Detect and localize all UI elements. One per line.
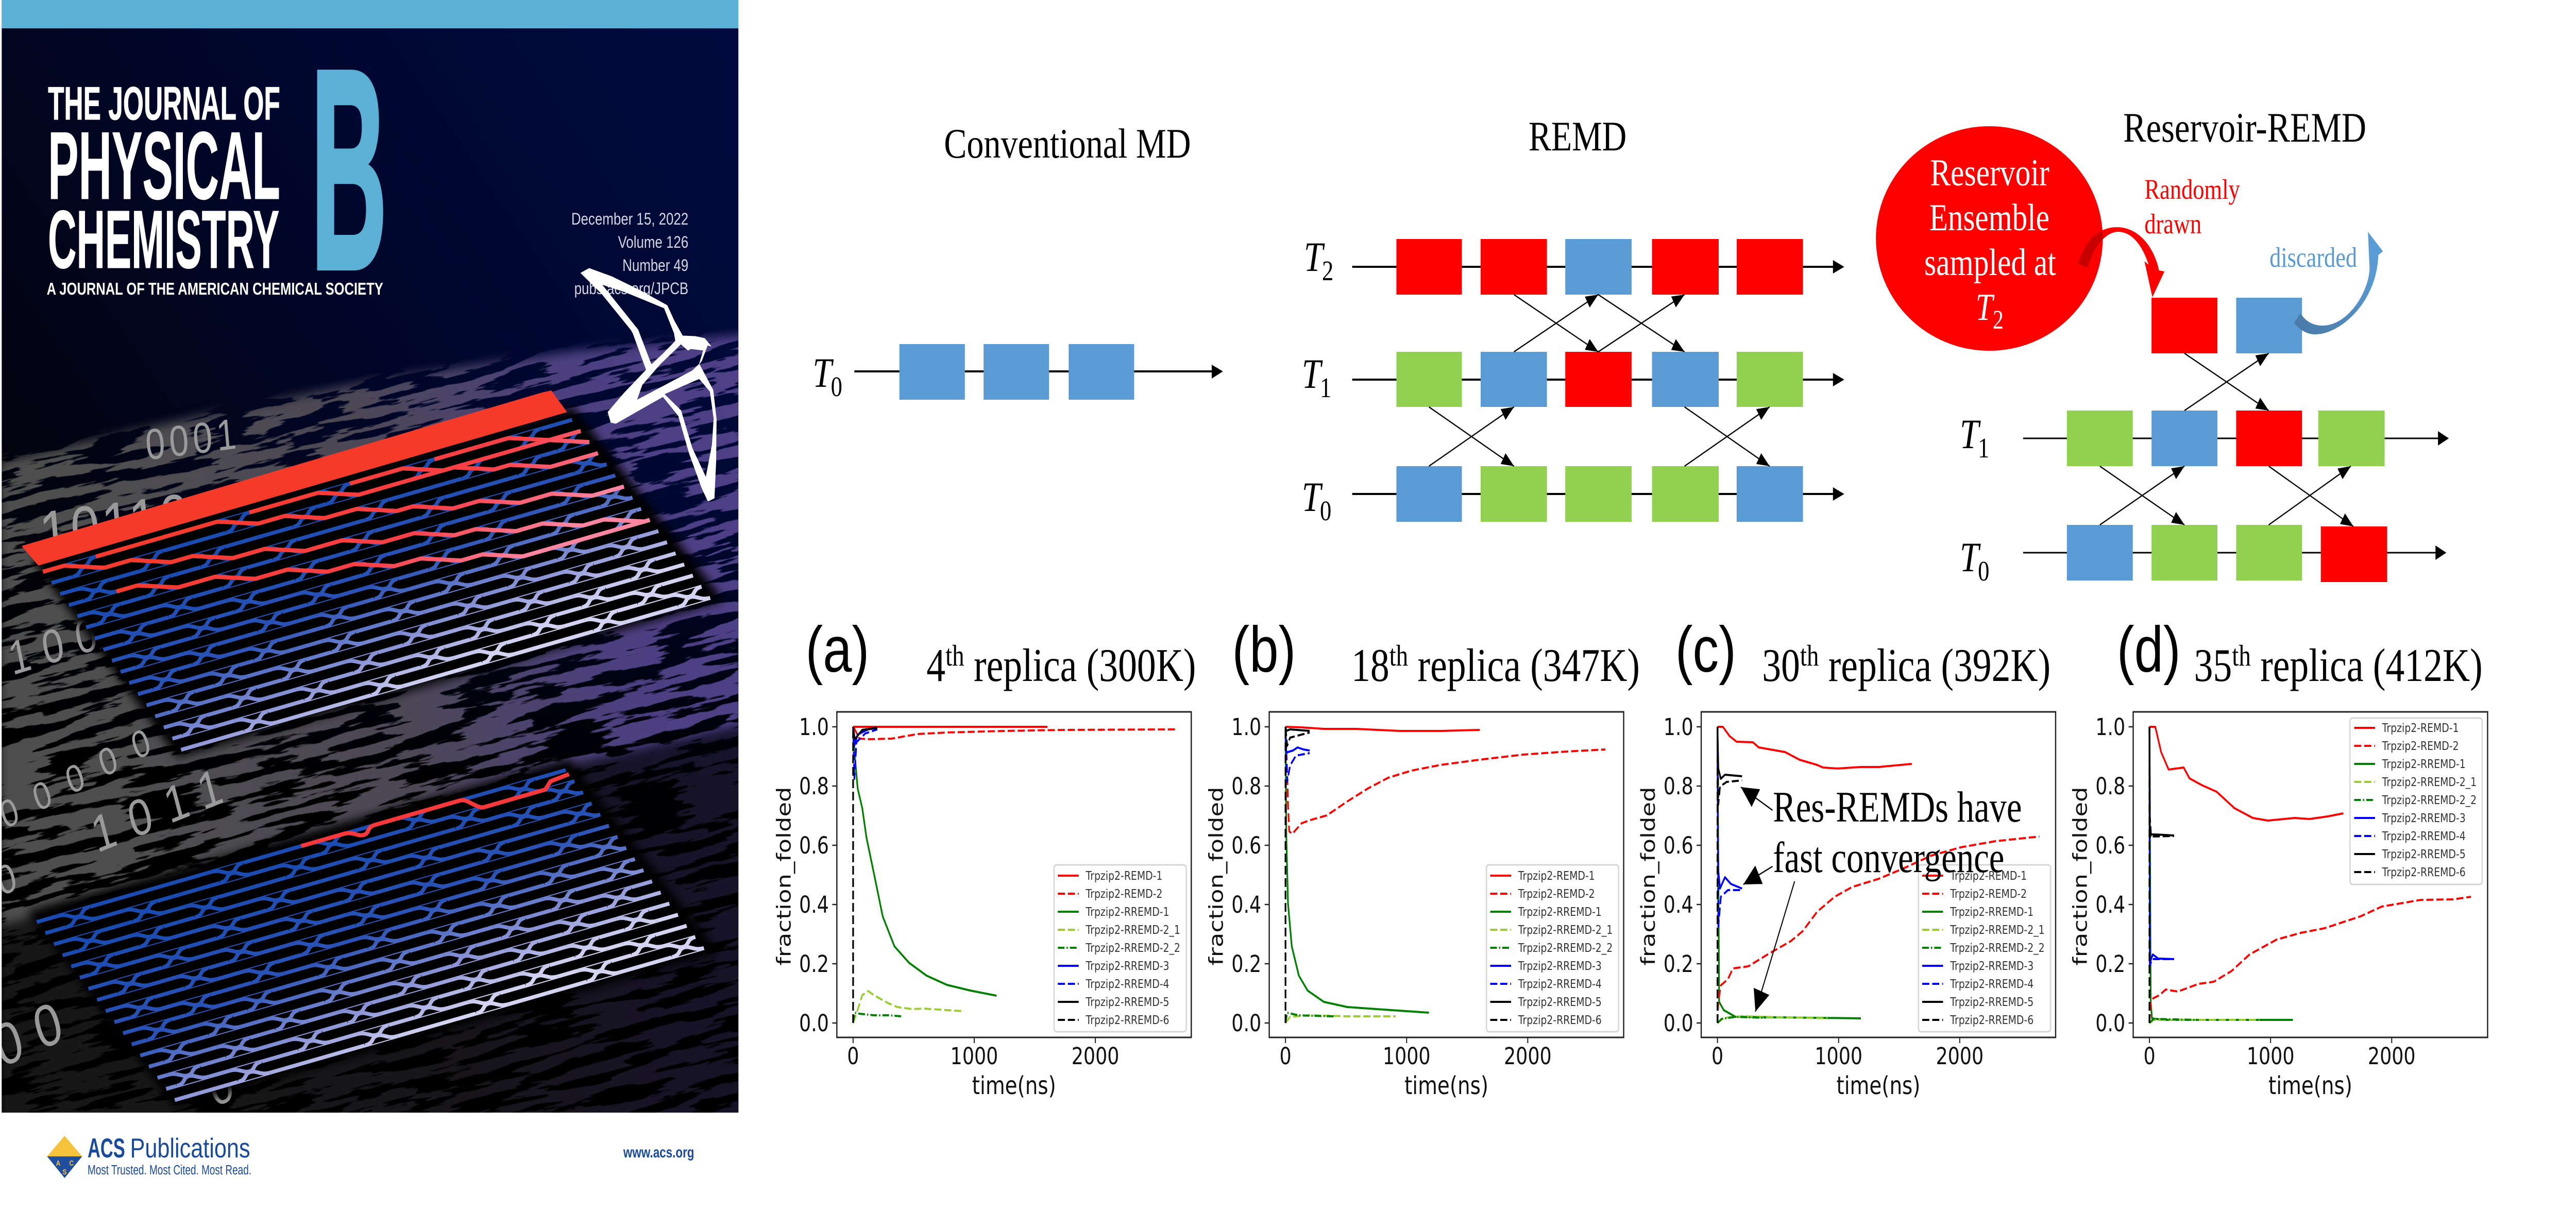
line chart: Trpzip2-RREMD-3 bbox=[1518, 959, 1602, 973]
reservoir text: Ensemble bbox=[1929, 196, 2049, 238]
line chart: 0.6 bbox=[2095, 832, 2125, 859]
reservoir text: sampled at bbox=[1924, 241, 2056, 283]
line chart: Trpzip2-RREMD-3 bbox=[2382, 811, 2466, 825]
line chart: Trpzip2-RREMD-4 bbox=[1086, 977, 1170, 991]
journal title: THE JOURNAL OF bbox=[48, 77, 280, 130]
line chart: Trpzip2-RREMD-2_1 bbox=[1518, 923, 1613, 936]
chart title: th bbox=[2232, 639, 2251, 672]
line chart bbox=[773, 712, 1191, 1100]
line chart: Trpzip2-RREMD-2_1 bbox=[2382, 775, 2477, 789]
callout: Res-REMDs have fast convergence bbox=[1741, 782, 2022, 1012]
panel: chart (d) bbox=[2069, 614, 2487, 1100]
timeline arrowheads bbox=[1833, 260, 1844, 501]
line chart: fraction_folded bbox=[1637, 787, 1659, 966]
line chart: Trpzip2-RREMD-1 bbox=[1950, 905, 2033, 918]
line chart: time(ns) bbox=[1404, 1071, 1488, 1100]
line chart: time(ns) bbox=[972, 1071, 1056, 1100]
replica boxes bbox=[900, 344, 1134, 400]
cover artwork background: 0001 bbox=[144, 410, 238, 470]
line chart: Trpzip2-RREMD-2_1 bbox=[1086, 923, 1180, 936]
journal title: CHEMISTRY bbox=[48, 193, 279, 285]
line chart: Trpzip2-RREMD-4 bbox=[1950, 977, 2033, 991]
line chart: Trpzip2-REMD-1 bbox=[1518, 868, 1595, 882]
ACS logo bbox=[47, 1136, 82, 1178]
line chart: 0.8 bbox=[2095, 773, 2125, 800]
line chart: 0.0 bbox=[1664, 1010, 1693, 1037]
line chart: Trpzip2-REMD-2 bbox=[1086, 886, 1162, 900]
line chart: fraction_folded bbox=[773, 787, 795, 966]
T0 label: T bbox=[812, 350, 834, 397]
line chart: 2000 bbox=[2368, 1043, 2416, 1070]
panel label (d): (d) bbox=[2117, 614, 2181, 686]
temperature labels: 1 bbox=[1320, 372, 1331, 403]
line chart: 0.8 bbox=[799, 773, 829, 800]
red top bar of waveguide board bbox=[22, 390, 567, 566]
temperature labels: T bbox=[1302, 474, 1323, 521]
cover artwork background: 1011 bbox=[86, 752, 242, 864]
waveguide mesh board 2 bbox=[36, 770, 704, 1101]
line chart: Trpzip2-REMD-2 bbox=[2382, 739, 2459, 753]
panel: Reservoir-REMD schematic bbox=[1876, 105, 2449, 587]
temperature labels: 1 bbox=[1978, 432, 1989, 464]
heading: REMD: REMD bbox=[1529, 114, 1626, 160]
issue details: pubs.acs.org/JPCB bbox=[574, 280, 688, 298]
line chart: Trpzip2-RREMD-5 bbox=[1086, 995, 1170, 1009]
label: randomly drawn bbox=[2144, 174, 2240, 240]
panel: conventional MD schematic bbox=[812, 121, 1223, 402]
heading: Reservoir-REMD: Reservoir-REMD bbox=[2123, 105, 2366, 151]
line chart: Trpzip2-RREMD-2_2 bbox=[2382, 793, 2477, 807]
cover artwork background: 10110 bbox=[37, 480, 192, 571]
temperature labels: T bbox=[1304, 234, 1325, 281]
line chart bbox=[2069, 712, 2487, 1100]
chart title: 30 bbox=[1762, 639, 1800, 691]
line chart: Trpzip2-RREMD-1 bbox=[1518, 905, 1602, 918]
panel: journal cover bbox=[0, 0, 738, 1178]
line chart: 0.6 bbox=[1664, 832, 1693, 859]
heading: Conventional MD: Conventional MD bbox=[944, 121, 1191, 167]
chart title: th bbox=[945, 639, 964, 672]
T0 label: 0 bbox=[831, 371, 842, 402]
line chart: Trpzip2-RREMD-6 bbox=[1518, 1013, 1602, 1027]
journal subtitle: A JOURNAL OF THE AMERICAN CHEMICAL SOCIETY bbox=[47, 280, 383, 299]
line chart: 1.0 bbox=[799, 713, 829, 741]
line chart: 0.2 bbox=[1664, 950, 1693, 978]
line chart: 1.0 bbox=[1664, 713, 1693, 741]
line chart: Trpzip2-RREMD-5 bbox=[1950, 995, 2033, 1009]
replica boxes bbox=[2067, 298, 2387, 582]
timelines bbox=[2023, 438, 2439, 553]
temperature labels: 0 bbox=[1320, 495, 1331, 526]
line chart: Trpzip2-RREMD-3 bbox=[1086, 959, 1170, 973]
line chart: Trpzip2-RREMD-2_1 bbox=[1950, 923, 2045, 936]
temperature labels: 2 bbox=[1322, 255, 1333, 286]
line chart: 0.8 bbox=[1664, 773, 1693, 800]
line chart: 1000 bbox=[1383, 1043, 1431, 1070]
arrow: randomly drawn bbox=[2078, 227, 2164, 297]
line chart: 0 bbox=[847, 1043, 859, 1070]
journal title bbox=[48, 77, 280, 285]
line chart: 1000 bbox=[951, 1043, 998, 1070]
issue details: Number 49 bbox=[622, 257, 688, 275]
line chart: 0 bbox=[2143, 1043, 2156, 1070]
cover top band bbox=[2, 0, 738, 28]
line chart: 0.2 bbox=[1231, 950, 1261, 978]
reservoir ensemble ellipse bbox=[1876, 126, 2103, 351]
waveguide mesh board 1 bbox=[42, 419, 711, 751]
label: discarded: discarded bbox=[2269, 242, 2357, 273]
panel: chart (b) bbox=[1205, 614, 1640, 1100]
line chart: time(ns) bbox=[2268, 1071, 2352, 1100]
line chart: Trpzip2-REMD-1 bbox=[2382, 721, 2459, 735]
line chart: Trpzip2-RREMD-6 bbox=[1950, 1013, 2033, 1027]
line chart: 0 bbox=[1711, 1043, 1723, 1070]
panel: REMD schematic bbox=[1302, 114, 1844, 526]
journal title: PHYSICAL bbox=[48, 112, 280, 220]
line chart: Trpzip2-RREMD-2_2 bbox=[1950, 941, 2045, 954]
temperature labels: T bbox=[1302, 351, 1323, 398]
line chart: 2000 bbox=[1936, 1043, 1984, 1070]
line chart: 0.4 bbox=[799, 891, 829, 918]
line chart: Trpzip2-RREMD-5 bbox=[2382, 847, 2466, 861]
line chart: Trpzip2-RREMD-6 bbox=[1086, 1013, 1170, 1027]
line chart: Trpzip2-RREMD-2_2 bbox=[1518, 941, 1613, 954]
line chart bbox=[1205, 712, 1624, 1100]
line chart: 0 bbox=[1280, 1043, 1292, 1070]
issue details: Volume 126 bbox=[618, 234, 688, 252]
line chart: 1000 bbox=[1815, 1043, 1862, 1070]
chart title: 35 bbox=[2194, 639, 2232, 691]
icon: falcon bbox=[581, 268, 716, 501]
chart title: replica (412K) bbox=[2251, 639, 2483, 691]
line chart: 0.2 bbox=[799, 950, 829, 978]
reservoir text: T bbox=[1976, 286, 1995, 328]
line chart: fraction_folded bbox=[1205, 787, 1228, 966]
exchange arrows bbox=[1429, 295, 1770, 466]
line chart: Trpzip2-RREMD-4 bbox=[1518, 977, 1602, 991]
chart title: replica (347K) bbox=[1408, 639, 1640, 691]
line chart: Trpzip2-REMD-1 bbox=[1950, 868, 2027, 882]
line chart bbox=[1637, 712, 2056, 1100]
panel label (c): (c) bbox=[1675, 614, 1736, 686]
line chart: 2000 bbox=[1504, 1043, 1552, 1070]
line chart: 0.4 bbox=[1664, 891, 1693, 918]
timeline arrowheads bbox=[2435, 431, 2449, 560]
temperature labels bbox=[1960, 412, 1989, 587]
ACS logo: C bbox=[69, 1159, 74, 1167]
line chart: 1000 bbox=[2247, 1043, 2295, 1070]
line chart: Trpzip2-RREMD-5 bbox=[1518, 995, 1602, 1009]
issue details bbox=[571, 211, 688, 298]
temperature labels: T bbox=[1960, 412, 1981, 458]
label: randomly drawn: Randomly bbox=[2144, 174, 2240, 205]
ACS logo: S bbox=[62, 1168, 66, 1176]
panel label (a): (a) bbox=[806, 614, 869, 686]
line chart: Trpzip2-RREMD-1 bbox=[2382, 757, 2466, 771]
line chart: Trpzip2-RREMD-3 bbox=[1950, 959, 2033, 973]
cover artwork background: 0 bbox=[202, 1054, 240, 1118]
chart title: th bbox=[1800, 639, 1819, 672]
panel: chart (a) bbox=[773, 614, 1196, 1100]
timeline with arrow bbox=[854, 365, 1223, 379]
reservoir text bbox=[1924, 151, 2056, 335]
callout: Res-REMDs have fast convergence: Res-REMDs have bbox=[1773, 782, 2022, 831]
line chart: 0.4 bbox=[1231, 891, 1261, 918]
line chart: 0.0 bbox=[1231, 1010, 1261, 1037]
line chart: 0.2 bbox=[2095, 950, 2125, 978]
line chart: 0.0 bbox=[799, 1010, 829, 1037]
line chart: Trpzip2-RREMD-6 bbox=[2382, 865, 2466, 879]
temperature labels: T bbox=[1960, 535, 1981, 581]
line chart: Trpzip2-RREMD-4 bbox=[2382, 829, 2466, 843]
line chart: Trpzip2-RREMD-1 bbox=[1086, 905, 1170, 918]
line chart: 0.8 bbox=[1231, 773, 1261, 800]
line chart: 2000 bbox=[1072, 1043, 1119, 1070]
issue details: December 15, 2022 bbox=[571, 211, 688, 229]
chart title: 18 bbox=[1351, 639, 1389, 691]
line chart: 0.0 bbox=[2095, 1010, 2125, 1037]
chart title: 4 bbox=[926, 639, 945, 691]
reservoir text: Reservoir bbox=[1930, 151, 2049, 194]
callout: Res-REMDs have fast convergence: fast convergence bbox=[1773, 833, 2004, 882]
website: www.acs.org bbox=[623, 1144, 694, 1161]
line chart: 1.0 bbox=[2095, 713, 2125, 741]
ACS Publications wordmark: Publications bbox=[130, 1133, 250, 1164]
timelines bbox=[1352, 267, 1835, 494]
cover artwork background: 100 bbox=[4, 607, 101, 685]
line chart: Trpzip2-REMD-2 bbox=[1950, 886, 2027, 900]
temperature labels: 0 bbox=[1978, 555, 1989, 587]
temperature labels bbox=[1302, 234, 1333, 526]
ACS Publications wordmark: ACS bbox=[88, 1133, 125, 1164]
panel label (b): (b) bbox=[1232, 614, 1296, 686]
line chart: 1.0 bbox=[1231, 713, 1261, 741]
cover artwork background: 000000 bbox=[0, 694, 206, 837]
chart title: replica (300K) bbox=[964, 639, 1196, 691]
line chart: Trpzip2-REMD-2 bbox=[1518, 886, 1595, 900]
line chart: 0.4 bbox=[2095, 891, 2125, 918]
line chart: fraction_folded bbox=[2069, 787, 2092, 966]
label: randomly drawn: drawn bbox=[2144, 208, 2201, 240]
ACS Publications wordmark: Most Trusted. Most Cited. Most Read. bbox=[88, 1163, 251, 1178]
chart title: th bbox=[1389, 639, 1408, 672]
panel: journal cover: B bbox=[311, 11, 387, 329]
line chart: 0.6 bbox=[799, 832, 829, 859]
line chart: Trpzip2-REMD-1 bbox=[1086, 868, 1162, 882]
chart title: replica (392K) bbox=[1819, 639, 2050, 691]
ACS Publications wordmark bbox=[88, 1133, 251, 1178]
cover artwork background bbox=[0, 28, 738, 1118]
replica boxes bbox=[1396, 239, 1803, 522]
line chart: Trpzip2-RREMD-2_2 bbox=[1086, 941, 1180, 954]
line chart: time(ns) bbox=[1837, 1071, 1920, 1100]
exchange arrows bbox=[2100, 353, 2353, 526]
arrow: discarded bbox=[2294, 232, 2383, 334]
reservoir text: 2 bbox=[1993, 305, 2004, 335]
line chart: 0.6 bbox=[1231, 832, 1261, 859]
ACS logo: A bbox=[56, 1159, 60, 1167]
panel: chart (c) bbox=[1637, 614, 2056, 1100]
